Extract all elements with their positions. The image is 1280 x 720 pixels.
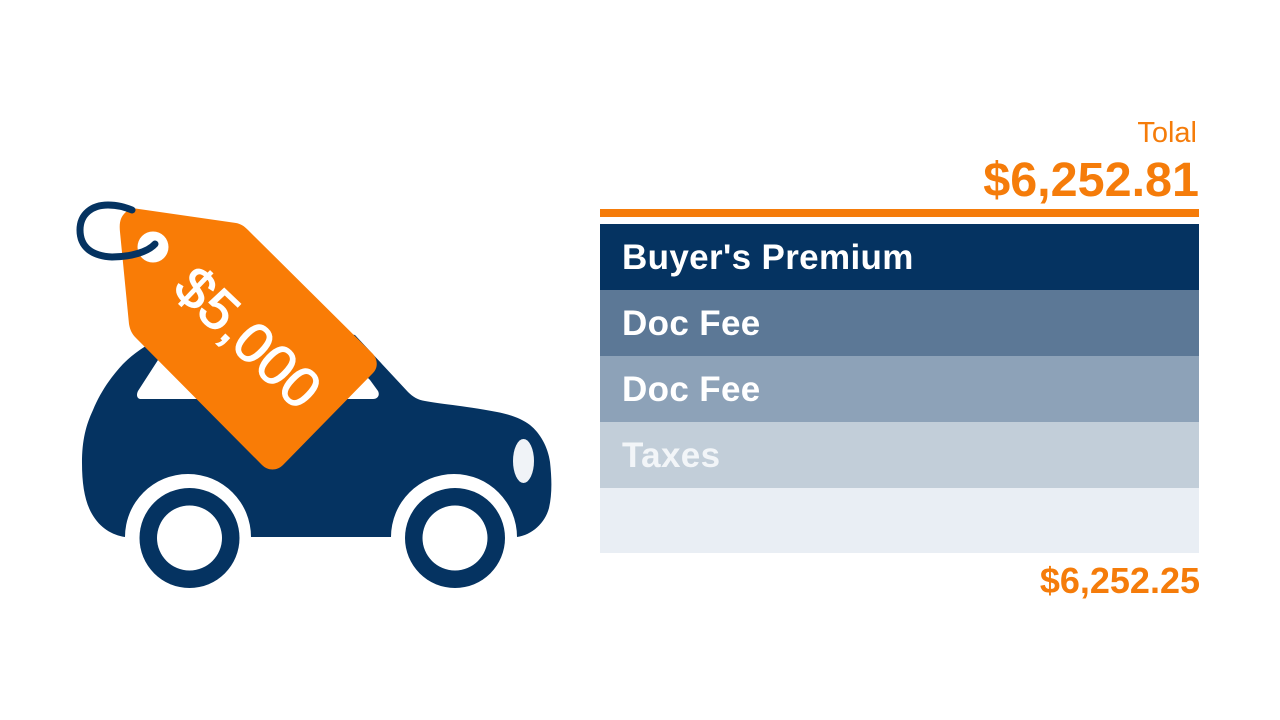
- total amount: $6,252.81: [983, 153, 1199, 207]
- icon: car: [82, 330, 551, 588]
- headlight: [513, 439, 534, 483]
- stacked fee table: [600, 224, 1199, 553]
- tag price: $5,000: [163, 254, 334, 421]
- row: doc fee: [600, 290, 1199, 356]
- row: buyer's premium: [600, 224, 1199, 290]
- tag eyelet: [138, 232, 168, 262]
- rear wheel: [140, 488, 240, 588]
- row: doc fee 2: [600, 356, 1199, 422]
- row: taxes: Taxes: [622, 436, 720, 475]
- tag string: [80, 205, 155, 257]
- bottom amount: $6,252.25: [1040, 560, 1200, 601]
- row: empty: [600, 488, 1199, 553]
- row: doc fee: Doc Fee: [622, 304, 761, 343]
- row: buyer's premium: Buyer's Premium: [622, 238, 914, 277]
- window: front: [335, 372, 379, 399]
- window: rear: [137, 360, 215, 399]
- illustration: car with price tag: [76, 202, 552, 588]
- orange rule: [600, 209, 1199, 217]
- front wheel: [405, 488, 505, 588]
- row: doc fee 2: Doc Fee: [622, 370, 761, 409]
- icon: price tag: [80, 205, 377, 470]
- row: taxes: [600, 422, 1199, 488]
- total label: Tolal: [1137, 117, 1197, 149]
